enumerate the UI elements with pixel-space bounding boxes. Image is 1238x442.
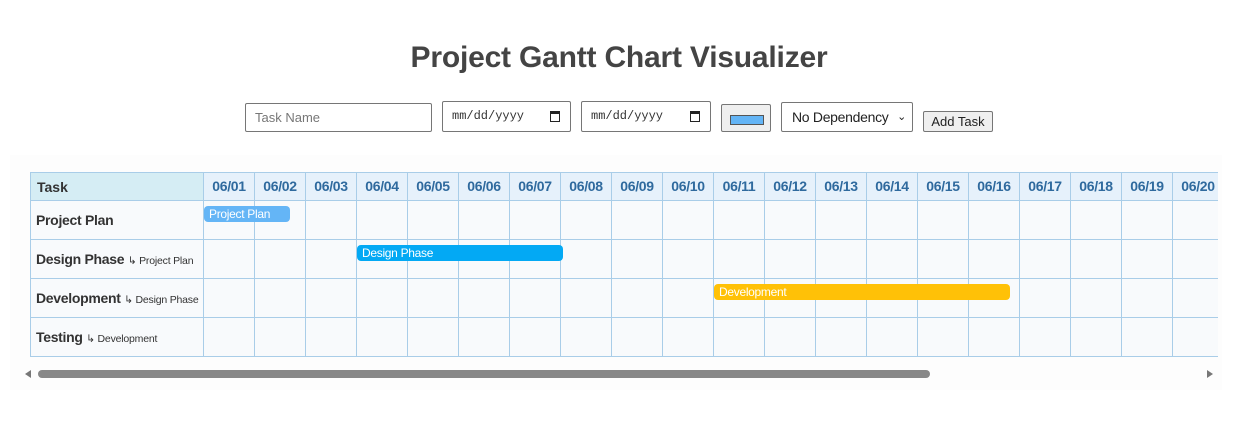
- header row: Task: [37, 179, 68, 195]
- task label: Testing: Testing ↳ Development: [36, 329, 157, 345]
- input: start date: [442, 101, 571, 132]
- bar: Design Phase: [357, 245, 563, 261]
- header row: 06/06: [467, 178, 501, 194]
- bar: Project Plan: Project Plan: [209, 207, 270, 221]
- input: start date: mm/dd/yyyy: [452, 109, 524, 123]
- task label: Design Phase: Design Phase ↳ Project Plan: [36, 251, 193, 267]
- input: color: [721, 104, 771, 132]
- header row: 06/01: [212, 178, 246, 194]
- header row: 06/08: [569, 178, 603, 194]
- header row: 06/02: [263, 178, 297, 194]
- select: dependency: ⌄: [897, 111, 906, 123]
- header row: 06/20: [1181, 178, 1215, 194]
- header row: 06/18: [1079, 178, 1113, 194]
- select: dependency: No Dependency: [792, 109, 888, 125]
- form controls: [245, 101, 993, 132]
- panel: gantt chart: [10, 155, 1222, 390]
- input: end date: mm/dd/yyyy: [591, 109, 663, 123]
- title: Project Gantt Chart Visualizer: [411, 41, 827, 74]
- header row: 06/17: [1028, 178, 1062, 194]
- bar: Design Phase: Design Phase: [362, 246, 433, 260]
- header row: 06/04: [365, 178, 399, 194]
- button: add task: Add Task: [931, 114, 985, 129]
- header row: 06/15: [926, 178, 960, 194]
- header row: [30, 173, 1218, 200]
- input: task name: Task Name: [255, 110, 320, 125]
- select: dependency: [781, 102, 913, 132]
- bar: Development: [714, 284, 1010, 300]
- header row: 06/14: [875, 178, 909, 194]
- header row: 06/09: [620, 178, 654, 194]
- header row: 06/12: [773, 178, 807, 194]
- header row: 06/05: [416, 178, 450, 194]
- header row: 06/11: [723, 178, 755, 194]
- bar: Development: Development: [719, 285, 786, 299]
- header row: 06/07: [518, 178, 552, 194]
- input: task name: [245, 103, 432, 132]
- scrollbar: [25, 370, 1213, 378]
- header row: 06/03: [314, 178, 348, 194]
- task label: Project Plan: Project Plan: [36, 212, 113, 228]
- header row: 06/16: [977, 178, 1011, 194]
- header row: 06/13: [824, 178, 858, 194]
- header row: 06/10: [671, 178, 705, 194]
- bar: Project Plan: [204, 206, 290, 222]
- input: end date: [581, 101, 711, 132]
- button: add task: [923, 111, 993, 132]
- header row: 06/19: [1130, 178, 1164, 194]
- task label: Development: Development ↳ Design Phase: [36, 290, 198, 306]
